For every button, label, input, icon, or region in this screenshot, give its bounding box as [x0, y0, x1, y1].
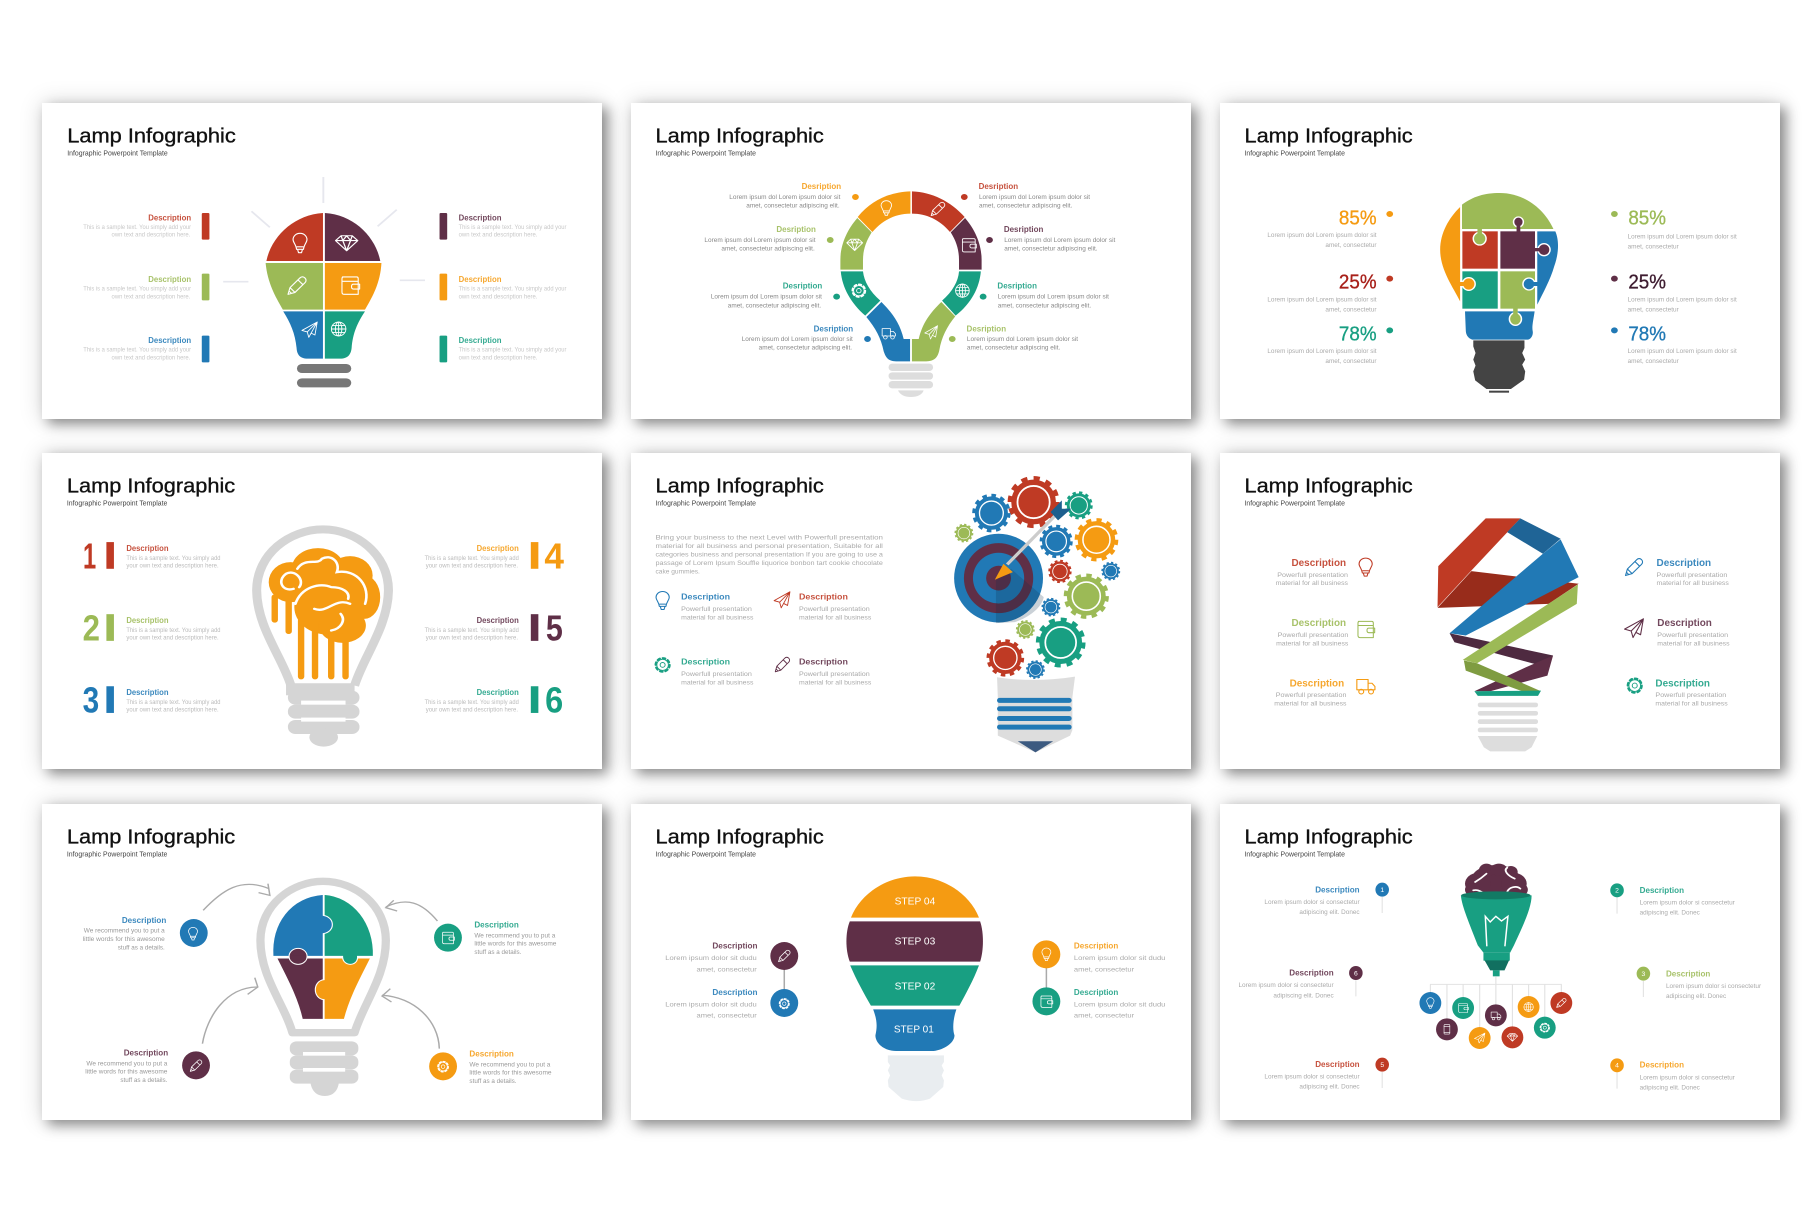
heading: Lamp Infographic [67, 475, 236, 497]
heading: Lamp Infographic [1244, 475, 1413, 497]
item 5 [425, 609, 563, 649]
item: red: amet, consectetur adipiscing elit. [979, 203, 1072, 209]
item 3: adipiscing elit. Donec [1666, 993, 1727, 1000]
stat: 25% red: Lorem ipsum dol Lorem ipsum dolor sit [1267, 297, 1377, 303]
item: orange: Lorem ipsum dol Lorem ipsum dolor sit [729, 194, 841, 201]
item: teal: stuff as a details. [474, 949, 522, 956]
item: purple: This is a sample text. You simply add your [459, 224, 567, 231]
item 6: your own text and description here. [426, 707, 518, 713]
item: green: amet, consectetur adipiscing elit. [721, 246, 815, 253]
heading: Lamp Infographic [67, 125, 236, 147]
item 3 [1637, 967, 1762, 1000]
item: green: Description [148, 275, 191, 284]
item 1: your own text and description here. [126, 563, 219, 569]
stat: 25% red: 25% [1339, 271, 1377, 293]
heading: Infographic Powerpoint Template [655, 850, 756, 859]
item 1: This is a sample text. You simply add [126, 555, 221, 562]
item: teal left: Desription [783, 281, 823, 291]
item: blue: stuff as a details. [118, 945, 165, 951]
item: blue: material for all business [681, 615, 754, 621]
item 3 [83, 681, 221, 721]
connector tree [1430, 976, 1562, 1029]
item: blue: own text and description here. [112, 355, 190, 361]
item: blue [83, 336, 209, 362]
item: purple: material for all business [799, 680, 872, 686]
item: blue: Description [712, 988, 758, 997]
item: teal: Description [1655, 679, 1710, 689]
stat: 78% blue: 78% [1628, 323, 1666, 345]
item 3: Description [1666, 969, 1711, 978]
lamp base with stripes [997, 677, 1075, 752]
heading: Infographic Powerpoint Template [1244, 850, 1345, 859]
stat: 78% teal: 78% [1339, 323, 1377, 345]
item: blue [1626, 559, 1729, 587]
item: red [774, 592, 872, 621]
heading: Lamp Infographic [1244, 125, 1413, 147]
item: teal: This is a sample text. You simply add your [459, 347, 567, 354]
item 6: Description [477, 688, 519, 697]
step 01: STEP 01 [894, 1024, 934, 1035]
intro paragraph: Bring your business to the next Level with Powerfull presentation [655, 535, 883, 542]
item 4: Lorem ipsum dolor si consectetur [1640, 1075, 1736, 1081]
lamp base [889, 364, 933, 397]
item: red: Description [1292, 559, 1346, 569]
item 5: 5 [546, 609, 563, 649]
item: blue: Desription [814, 324, 853, 333]
heading: Lamp Infographic [655, 475, 824, 497]
item: green: Description [1292, 619, 1346, 629]
item: teal left [711, 281, 840, 309]
item: red: Powerfull presentation [1277, 572, 1348, 579]
item 3: Description [126, 688, 169, 697]
item 3: your own text and description here. [126, 707, 219, 713]
item: purple: Description [124, 1048, 168, 1057]
item: teal: Description [1074, 988, 1119, 997]
panel: step lamp [631, 804, 1191, 1120]
item: red: material for all business [799, 615, 872, 621]
funnel bulb [1461, 891, 1532, 976]
item: orange: amet, consectetur adipiscing elit. [746, 203, 840, 209]
step 03: STEP 03 [895, 936, 935, 947]
lamp outline and base [260, 881, 386, 1096]
item: blue: Lorem ipsum dol Lorem ipsum dolor sit [742, 336, 853, 343]
folded ribbon lamp [1438, 518, 1579, 696]
item 1 [1264, 883, 1389, 916]
intro paragraph: material for all business and personal presentation, Suitable for all [655, 543, 884, 550]
item: teal: Lorem ipsum dolor sit dudu [1074, 1002, 1166, 1008]
item 6: This is a sample text. You simply add [425, 699, 519, 706]
item: red: Powerfull presentation [799, 606, 870, 613]
item: teal: We recommend you to put a [474, 933, 556, 939]
item: blue: amet, consectetur adipiscing elit. [759, 345, 852, 352]
step 01 [873, 1009, 956, 1051]
item: teal [440, 336, 567, 362]
item: orange: Desription [802, 182, 841, 191]
heading: Lamp Infographic [655, 125, 824, 147]
stat: 85% orange: Lorem ipsum dol Lorem ipsum dolor sit [1267, 232, 1377, 239]
item: green: Lorem ipsum dol Lorem ipsum dolor sit [704, 237, 816, 244]
item: blue: Description [1657, 559, 1711, 569]
item: blue: amet, consectetur [697, 1013, 758, 1020]
item: green right: Desription [967, 324, 1006, 333]
stat: 85% orange: 85% [1339, 207, 1377, 229]
item: green: Desription [776, 225, 816, 234]
item: teal right: Desription [997, 281, 1037, 291]
item 6: 6 [1354, 971, 1358, 977]
item 5 [1264, 1058, 1389, 1091]
item: red: material for all business [1276, 580, 1349, 587]
item 6: adipiscing elit. Donec [1273, 993, 1334, 999]
step 04: STEP 04 [895, 896, 935, 907]
panel: jigsaw lamp with arrows [42, 804, 602, 1120]
item 1 [83, 537, 221, 577]
arrow: top right [386, 900, 437, 921]
item: red: This is a sample text. You simply add your [83, 224, 192, 231]
item 2 [1610, 883, 1736, 917]
item 2: Description [1640, 885, 1684, 895]
item: green: material for all business [1276, 641, 1349, 647]
heading [67, 125, 236, 158]
panel: six segment lamp [42, 103, 602, 419]
item: teal right: amet, consectetur adipiscing elit. [998, 303, 1091, 309]
target with arrow [954, 500, 1071, 623]
heading [1244, 125, 1413, 158]
stat: 78% teal: Lorem ipsum dol Lorem ipsum dolor sit [1267, 348, 1377, 355]
item: purple: Powerfull presentation [1657, 633, 1728, 639]
item: orange: We recommend you to put a [469, 1062, 551, 1068]
heading: Lamp Infographic [67, 826, 236, 848]
item 1: Description [126, 544, 169, 553]
ring lamp segments [840, 191, 982, 361]
item: red: Description [799, 592, 848, 601]
item 1: adipiscing elit. Donec [1299, 909, 1360, 916]
item 1: Lorem ipsum dolor si consectetur [1264, 899, 1360, 906]
item: purple: stuff as a details. [120, 1077, 168, 1084]
jigsaw pieces [273, 894, 373, 1019]
lamp base [888, 1055, 944, 1101]
item: teal left: Lorem ipsum dol Lorem ipsum dolor sit [711, 294, 822, 301]
item 4: adipiscing elit. Donec [1640, 1085, 1700, 1091]
item: orange [429, 1049, 552, 1085]
item: purple: little words for this awesome [85, 1069, 168, 1076]
light rays [223, 177, 425, 282]
item: blue: Description [681, 592, 730, 601]
item: teal [434, 920, 557, 956]
item: blue: This is a sample text. You simply add your [83, 347, 192, 354]
item: blue: Lorem ipsum dolor sit dudu [665, 1002, 757, 1008]
item: teal: Description [681, 657, 730, 666]
heading: Infographic Powerpoint Template [67, 149, 168, 158]
item: purple: material for all business [1657, 641, 1730, 647]
item 2: This is a sample text. You simply add [126, 627, 221, 634]
intro paragraph: categories business and personal presentation If you are going to use a [655, 552, 883, 558]
item 4: This is a sample text. You simply add [425, 555, 519, 562]
item: green [83, 274, 209, 300]
intro paragraph: passage of Lorem Ipsum Souffle liquorice bonbon tart cookie chocolate [655, 560, 883, 567]
item: purple [665, 941, 798, 973]
item 2: Description [126, 616, 169, 625]
item 2 [83, 609, 221, 649]
item: blue: little words for this awesome [83, 936, 165, 943]
heading [1244, 826, 1413, 859]
item: purple [1625, 619, 1730, 647]
panel: ring lamp [631, 103, 1191, 419]
item 6 [425, 681, 563, 721]
stat: 85% orange: amet, consectetur [1325, 242, 1377, 249]
stat: 25% red [1267, 271, 1393, 313]
item 4: 4 [1615, 1063, 1619, 1070]
step 03 [846, 921, 983, 962]
heading: Infographic Powerpoint Template [655, 499, 756, 508]
item 6: Lorem ipsum dolor si consectetur [1238, 982, 1334, 989]
arrow: top left [203, 884, 270, 910]
item: blue [742, 324, 871, 352]
item: purple: Description [1657, 619, 1712, 629]
stat: 25% purple: amet, consectetur [1628, 307, 1679, 313]
icon circles [1419, 992, 1572, 1049]
stat: 25% purple: Lorem ipsum dol Lorem ipsum dolor sit [1628, 297, 1737, 303]
item 5: Lorem ipsum dolor si consectetur [1264, 1074, 1360, 1081]
heading: Infographic Powerpoint Template [67, 499, 167, 508]
item: teal: Description [459, 336, 502, 345]
step 02: STEP 02 [895, 981, 935, 992]
intro paragraph: cake gummies. [655, 569, 700, 575]
item: purple [85, 1048, 210, 1084]
heading [1244, 475, 1413, 508]
lamp base [1478, 703, 1538, 751]
lamp outline [257, 529, 388, 747]
heading [67, 475, 236, 508]
item: teal right [980, 281, 1109, 309]
intro paragraph [655, 535, 884, 575]
item: orange: Description [459, 275, 502, 284]
item 3: 3 [83, 681, 99, 721]
item: teal [656, 657, 754, 686]
stat: 78% teal: amet, consectetur [1325, 358, 1377, 365]
arrow: bottom left [202, 978, 258, 1044]
item: purple: Description [459, 213, 502, 222]
item: green [1276, 619, 1375, 647]
item: orange: This is a sample text. You simply add your [459, 286, 567, 293]
item 2: your own text and description here. [126, 635, 219, 641]
item: teal: own text and description here. [459, 355, 537, 361]
puzzle lamp [1440, 193, 1558, 393]
item: blue: We recommend you to put a [84, 928, 165, 935]
item: orange [1274, 679, 1375, 707]
heading: Lamp Infographic [655, 826, 824, 848]
heading: Lamp Infographic [1244, 826, 1413, 848]
item 2: 2 [83, 609, 100, 649]
stat: 78% blue: Lorem ipsum dol Lorem ipsum dolor sit [1628, 348, 1737, 355]
item: blue [83, 916, 208, 951]
stat: 85% orange [1267, 207, 1393, 249]
item: green: Powerfull presentation [1278, 633, 1349, 639]
item: red: own text and description here. [112, 232, 190, 239]
item 2: 2 [1615, 888, 1619, 895]
item: red: Description [148, 213, 191, 222]
heading [655, 826, 824, 859]
item: purple: amet, consectetur adipiscing elit. [1004, 246, 1098, 253]
segment icons [288, 233, 360, 337]
item 5: Description [477, 616, 519, 625]
item: orange: own text and description here. [459, 294, 537, 300]
item: red [83, 213, 209, 240]
brain [269, 548, 380, 677]
stat: 25% red: amet, consectetur [1325, 307, 1377, 313]
item: green: own text and description here. [112, 294, 190, 300]
item 5: adipiscing elit. Donec [1299, 1084, 1360, 1091]
heading: Infographic Powerpoint Template [1244, 149, 1345, 158]
step 04 [851, 876, 979, 918]
item: purple: Powerfull presentation [799, 672, 870, 678]
item: blue [656, 591, 754, 621]
item: red [1276, 558, 1372, 587]
item: purple [986, 225, 1115, 253]
item 4: Description [1640, 1060, 1684, 1070]
stat: 25% purple: 25% [1628, 271, 1666, 293]
item: blue: material for all business [1657, 580, 1729, 587]
item: orange [440, 274, 567, 300]
item 6 [1238, 966, 1363, 999]
lamp segments [266, 213, 381, 387]
stat: 78% teal [1267, 323, 1393, 365]
item: purple: Lorem ipsum dol Lorem ipsum dolor sit [1004, 237, 1115, 244]
item: teal right: Lorem ipsum dol Lorem ipsum dolor sit [998, 294, 1109, 301]
item: blue: Description [122, 916, 167, 925]
item 3: Lorem ipsum dolor si consectetur [1666, 983, 1762, 990]
stat: 85% green: Lorem ipsum dol Lorem ipsum dolor sit [1628, 234, 1737, 241]
stat: 85% green [1611, 207, 1737, 251]
item: orange [1032, 940, 1166, 973]
item 1: 1 [83, 537, 96, 577]
item: teal: little words for this awesome [474, 941, 557, 948]
item 4 [425, 537, 565, 577]
item: teal: Powerfull presentation [681, 672, 752, 678]
item 5: your own text and description here. [426, 635, 518, 641]
panel: ribbon lamp [1220, 453, 1780, 769]
item: orange [729, 182, 859, 209]
item: green [704, 225, 834, 253]
item: teal [1032, 987, 1166, 1020]
brain [1465, 864, 1528, 896]
item: teal: amet, consectetur [1074, 1013, 1135, 1020]
item 3: This is a sample text. You simply add [126, 699, 221, 706]
heading [655, 125, 824, 158]
item 5: 5 [1380, 1062, 1385, 1069]
item 4: Description [477, 544, 519, 553]
item: blue: Powerfull presentation [1657, 572, 1728, 579]
arrow: bottom right [382, 989, 439, 1049]
item: green right: Lorem ipsum dol Lorem ipsum dolor sit [967, 336, 1078, 343]
right connector [1044, 965, 1048, 989]
item 1: 1 [1380, 887, 1385, 894]
item 5: Description [1315, 1059, 1360, 1069]
item: red [961, 182, 1090, 209]
item 3: 3 [1642, 971, 1646, 978]
heading: Infographic Powerpoint Template [67, 850, 167, 859]
item 2: Lorem ipsum dolor si consectetur [1640, 900, 1736, 907]
heading: Infographic Powerpoint Template [1244, 499, 1345, 508]
item: purple: own text and description here. [459, 232, 537, 239]
item: teal: Description [474, 920, 519, 930]
item 6: 6 [545, 681, 563, 721]
item: orange: material for all business [1274, 701, 1347, 707]
left connector [782, 967, 786, 990]
item: green right [949, 324, 1078, 352]
item: orange: little words for this awesome [469, 1070, 552, 1077]
item: teal: material for all business [681, 680, 754, 686]
stat: 85% green: 85% [1628, 207, 1666, 229]
item: red: Desription [979, 182, 1018, 191]
item: blue: Description [148, 336, 191, 345]
item: orange: Description [1290, 679, 1344, 689]
item 4 [1610, 1058, 1736, 1091]
item 4: 4 [544, 537, 565, 577]
gear cluster [955, 478, 1119, 678]
step 02 [850, 965, 979, 1006]
item: purple: Description [712, 941, 758, 951]
stat: 78% blue: amet, consectetur [1628, 358, 1679, 365]
item 2: adipiscing elit. Donec [1640, 910, 1700, 917]
item: purple [775, 657, 872, 686]
item: purple [440, 213, 567, 240]
item: teal: material for all business [1655, 701, 1728, 707]
item: orange: stuff as a details. [469, 1078, 517, 1085]
item 5: This is a sample text. You simply add [425, 627, 519, 634]
item: orange: Lorem ipsum dolor sit dudu [1074, 955, 1166, 962]
panel: puzzle lamp with percentages [1220, 103, 1780, 419]
item: green: This is a sample text. You simply add your [83, 286, 192, 293]
item: purple: We recommend you to put a [86, 1061, 168, 1067]
heading: Infographic Powerpoint Template [655, 149, 756, 158]
ring icons [847, 201, 976, 339]
item: green right: amet, consectetur adipiscing elit. [967, 345, 1060, 352]
heading [655, 475, 824, 508]
item: purple: amet, consectetur [697, 967, 758, 973]
item: orange: Description [469, 1049, 514, 1058]
item: blue: Powerfull presentation [681, 606, 752, 613]
heading [67, 826, 236, 859]
stat: 85% green: amet, consectetur [1628, 244, 1679, 251]
stat: 25% purple [1611, 271, 1737, 313]
panel: brain lamp [42, 453, 602, 769]
stat: 78% blue [1611, 323, 1737, 365]
panel: gears lamp [631, 453, 1191, 769]
item: orange: Powerfull presentation [1276, 693, 1347, 699]
item 4: your own text and description here. [426, 563, 518, 569]
item: teal: Powerfull presentation [1655, 693, 1726, 699]
item: purple: Lorem ipsum dolor sit dudu [665, 955, 757, 962]
item 6: Description [1289, 968, 1334, 978]
item 1: Description [1315, 885, 1360, 894]
item: teal left: amet, consectetur adipiscing elit. [728, 303, 821, 309]
panel: funnel lamp [1220, 804, 1780, 1120]
item: blue [665, 988, 798, 1020]
item: red: Lorem ipsum dol Lorem ipsum dolor sit [979, 194, 1090, 201]
item: teal [1628, 678, 1728, 707]
item: purple: Description [799, 657, 848, 666]
item: orange: amet, consectetur [1074, 967, 1135, 973]
item: purple: Desription [1004, 225, 1044, 234]
item: orange: Description [1074, 941, 1119, 951]
